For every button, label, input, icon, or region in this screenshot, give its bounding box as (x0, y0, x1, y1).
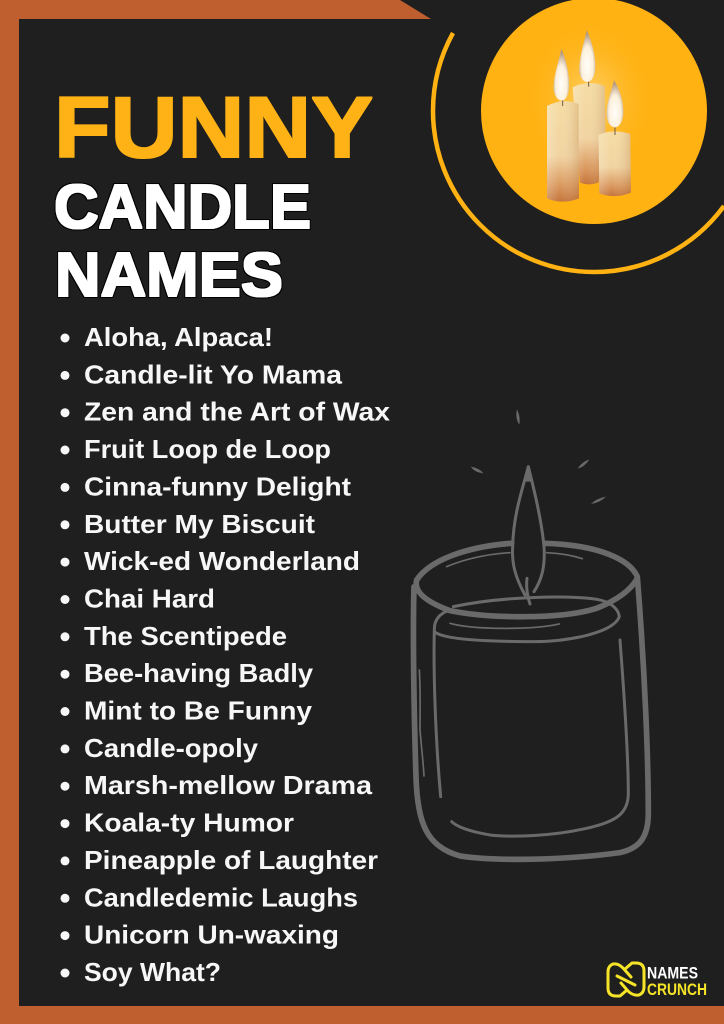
list items: Koala-ty Humor (84, 808, 294, 838)
list items: Butter My Biscuit (84, 509, 315, 539)
icon: back candle (573, 30, 606, 184)
list items: Bee-having Badly (84, 658, 314, 688)
icon: outlined candle in glass (413, 409, 648, 859)
list items: Cinna-funny Delight (84, 471, 351, 501)
logo text: CRUNCH (647, 981, 707, 999)
logo text (647, 964, 707, 999)
sparks (471, 409, 606, 504)
title word: FUNNY: FUNNY (54, 80, 373, 176)
list items: Marsh-mellow Drama (84, 770, 373, 800)
title word: NAMES: NAMES (55, 241, 283, 310)
decorative ring arc (433, 33, 724, 272)
candle wax inside the glass (434, 597, 628, 836)
list items: Chai Hard (84, 584, 215, 614)
list items: The Scentipede (84, 621, 287, 651)
list items: Zen and the Art of Wax (84, 397, 391, 427)
list items (84, 322, 391, 987)
logo: Names Crunch (608, 963, 707, 999)
list items: Soy What? (84, 957, 221, 987)
list items: Unicorn Un-waxing (84, 920, 339, 950)
title (54, 80, 373, 310)
bullets (60, 334, 70, 978)
list items: Wick-ed Wonderland (84, 546, 360, 576)
logo text: NAMES (647, 964, 698, 982)
glass outer body and rim (413, 543, 648, 859)
logo mark (608, 963, 644, 996)
list items: Pineapple of Laughter (84, 845, 378, 875)
icon: right candle (599, 80, 631, 196)
candle names list (60, 322, 391, 987)
highlights (419, 553, 582, 776)
list items: Candledemic Laughs (84, 882, 358, 912)
list items: Candle-lit Yo Mama (84, 359, 343, 389)
flame (512, 467, 544, 604)
icon: three lit candles in yellow circle (481, 0, 707, 224)
list items: Fruit Loop de Loop (84, 434, 331, 464)
list items: Candle-opoly (84, 733, 259, 763)
title word: CANDLE: CANDLE (54, 173, 311, 242)
icon: left candle (547, 49, 579, 202)
list items: Mint to Be Funny (84, 696, 313, 726)
list items: Aloha, Alpaca! (84, 322, 273, 352)
flame tip (525, 465, 533, 482)
